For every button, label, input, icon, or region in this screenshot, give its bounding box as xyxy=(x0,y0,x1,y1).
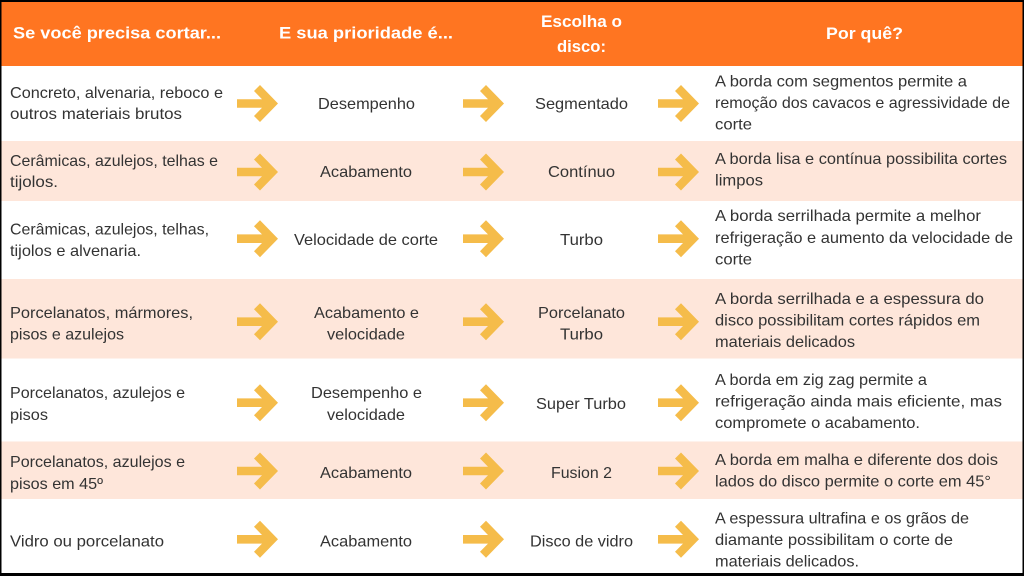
row 1: Segmentado xyxy=(535,96,628,113)
row 2: Acabamento xyxy=(320,164,412,181)
row 4 xyxy=(2,279,1022,358)
row 4: materiais delicados xyxy=(715,334,855,351)
row 5: refrigeração ainda mais eficiente, mas xyxy=(715,394,1002,410)
row 1: outros materiais brutos xyxy=(10,106,182,123)
row 4: Turbo xyxy=(560,326,603,344)
row 1 xyxy=(2,66,1022,141)
row 1: A borda com segmentos permite a xyxy=(715,74,967,90)
header band: disco: xyxy=(557,37,606,56)
row 5: A borda em zig zag permite a xyxy=(715,372,927,389)
row 5: compromete o acabamento. xyxy=(715,415,920,432)
row 4: velocidade xyxy=(327,326,405,344)
row 4: Acabamento e xyxy=(314,305,419,322)
header band: Por quê? xyxy=(826,24,903,43)
row 2: Contínuo xyxy=(548,164,615,181)
row 7: Disco de vidro xyxy=(530,534,633,550)
row 2: limpos xyxy=(715,172,763,190)
row 4: Porcelanatos, mármores, xyxy=(10,305,193,322)
row 7: Acabamento xyxy=(320,534,412,550)
header band xyxy=(2,2,1022,66)
row 2: A borda lisa e contínua possibilita cortes xyxy=(715,151,1007,168)
row 2 xyxy=(2,141,1022,201)
row 7: A espessura ultrafina e os grãos de xyxy=(715,510,969,528)
row 6: Acabamento xyxy=(320,465,412,482)
row 7 xyxy=(2,499,1022,573)
row 4: Porcelanato xyxy=(538,305,625,322)
row 3: refrigeração e aumento da velocidade de xyxy=(715,230,1013,247)
row 2: tijolos. xyxy=(10,174,58,191)
row 4: disco possibilitam cortes rápidos em xyxy=(715,312,980,330)
row 5: Desempenho e xyxy=(311,385,422,402)
row 3: corte xyxy=(715,252,752,268)
header band: Escolha o xyxy=(541,12,622,31)
row 5: velocidade xyxy=(327,407,405,424)
row 3: Cerâmicas, azulejos, telhas, xyxy=(10,222,209,238)
row 6: pisos em 45º xyxy=(10,476,103,493)
row 3 xyxy=(2,201,1022,279)
row 5: Super Turbo xyxy=(536,396,626,413)
row 3: tijolos e alvenaria. xyxy=(10,243,141,260)
header band: E sua prioridade é... xyxy=(279,24,453,42)
row 6: A borda em malha e diferente dos dois xyxy=(715,452,998,469)
row 4: A borda serrilhada e a espessura do xyxy=(715,291,984,308)
row 5: Porcelanatos, azulejos e xyxy=(10,385,185,402)
row 5: pisos xyxy=(10,407,48,424)
row 7: Vidro ou porcelanato xyxy=(10,534,164,550)
row 3: Velocidade de corte xyxy=(294,232,438,249)
header band: Se você precisa cortar... xyxy=(13,24,221,42)
row 6: Fusion 2 xyxy=(551,465,612,482)
row 2: Cerâmicas, azulejos, telhas e xyxy=(10,153,218,170)
row 1: Concreto, alvenaria, reboco e xyxy=(10,85,223,102)
row 6 xyxy=(2,442,1022,499)
row 6: Porcelanatos, azulejos e xyxy=(10,454,185,471)
row 4: pisos e azulejos xyxy=(10,326,124,344)
row 5 xyxy=(2,358,1022,442)
row 1: corte xyxy=(715,116,752,134)
row 1: Desempenho xyxy=(318,96,415,113)
row 1: remoção dos cavacos e agressividade de xyxy=(715,95,1010,112)
row 7: diamante possibilitam o corte de xyxy=(715,532,953,549)
row 6: lados do disco permite o corte em 45° xyxy=(715,474,991,490)
row 3: Turbo xyxy=(560,232,603,249)
row 3: A borda serrilhada permite a melhor xyxy=(715,208,982,225)
row 7: materiais delicados. xyxy=(715,554,859,570)
